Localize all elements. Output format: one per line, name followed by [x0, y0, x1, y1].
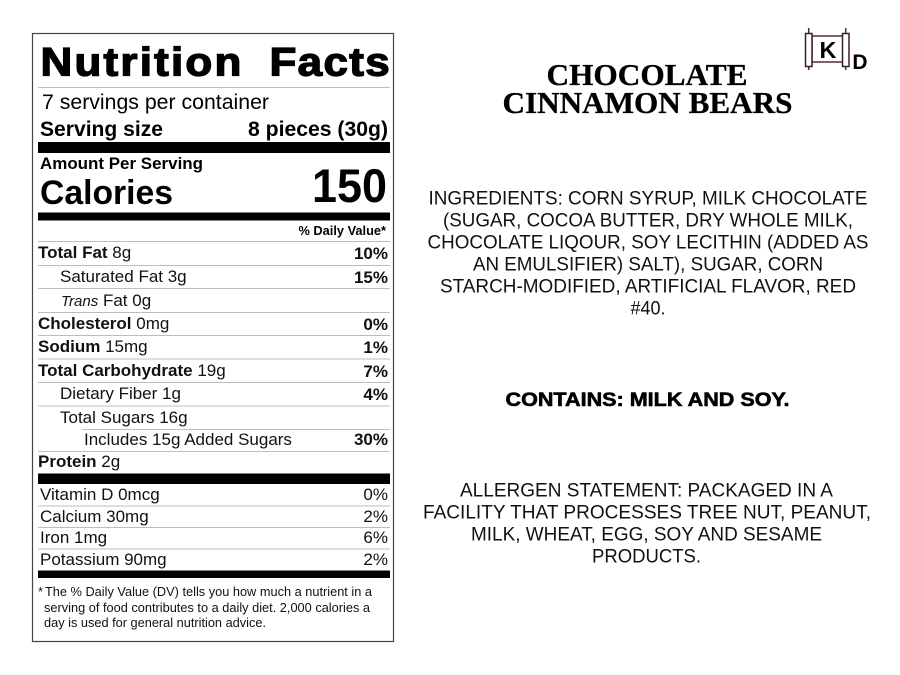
ingredients text: INGREDIENTS: CORN SYRUP, MILK CHOCOLATE	[428, 188, 868, 210]
row: protein: Protein 2g	[38, 452, 120, 471]
serving size row: Serving size	[40, 118, 163, 141]
row: saturated fat	[60, 267, 388, 287]
row: potassium: 2%	[363, 550, 388, 569]
icon: kosher dairy scroll mark: K	[820, 37, 837, 63]
row: calcium	[40, 507, 388, 526]
row: sodium: 1%	[363, 338, 388, 357]
row: cholesterol: Cholesterol 0mg	[38, 314, 169, 333]
row: added sugars: 30%	[354, 430, 388, 449]
row: potassium	[40, 550, 388, 569]
icon: kosher dairy scroll mark: D	[852, 51, 868, 74]
row: total carbohydrate: Total Carbohydrate 19g	[38, 361, 226, 380]
row: total carbohydrate	[38, 361, 388, 381]
heading: Nutrition Facts: Nutrition	[40, 39, 244, 84]
footnote: The % Daily Value (DV) tells you how much a nutrient in a	[45, 584, 373, 599]
allergen facility statement: PRODUCTS.	[592, 546, 701, 568]
daily value header: % Daily Value*	[298, 223, 386, 238]
row: total sugars: Total Sugars 16g	[60, 408, 188, 427]
ingredients text: STARCH-MODIFIED, ARTIFICIAL FLAVOR, RED	[440, 276, 856, 298]
row: calcium: 2%	[363, 507, 388, 526]
serving size row: 8 pieces (30g)	[248, 118, 388, 141]
heading: Nutrition Facts	[40, 39, 391, 84]
ingredients text	[428, 188, 868, 320]
thick divider	[38, 474, 390, 484]
row: saturated fat: Saturated Fat 3g	[60, 267, 187, 286]
row: added sugars	[84, 430, 388, 449]
allergen facility statement: ALLERGEN STATEMENT: PACKAGED IN A	[460, 480, 833, 502]
row: cholesterol: 0%	[363, 315, 388, 334]
row: dietary fiber	[60, 384, 388, 404]
row: dietary fiber: 4%	[363, 385, 388, 404]
footnote: day is used for general nutrition advice.	[44, 615, 266, 630]
footnote: serving of food contributes to a daily diet. 2,000 calories a	[44, 600, 371, 615]
row: potassium: Potassium 90mg	[40, 550, 167, 569]
ingredients text: (SUGAR, COCOA BUTTER, DRY WHOLE MILK,	[443, 210, 853, 232]
thick divider	[38, 142, 390, 153]
allergen facility statement: MILK, WHEAT, EGG, SOY AND SESAME	[471, 524, 822, 546]
row: trans fat: Trans Fat 0g	[61, 291, 151, 310]
product title	[502, 58, 792, 120]
ingredients text: AN EMULSIFIER) SALT), SUGAR, CORN	[473, 254, 823, 276]
row: vitamin D	[40, 485, 388, 504]
serving size row	[40, 118, 388, 141]
servings per container: 7 servings per container	[42, 91, 269, 114]
footnote	[38, 584, 373, 630]
row: saturated fat: 15%	[354, 268, 388, 287]
product title: CHOCOLATE	[546, 58, 748, 92]
row: vitamin D: 0%	[363, 485, 388, 504]
panel: nutrition facts label	[32, 34, 394, 642]
row: total fat	[38, 243, 388, 263]
allergen contains statement: CONTAINS: MILK AND SOY.	[506, 389, 790, 411]
row: calcium: Calcium 30mg	[40, 507, 149, 526]
row: sodium	[38, 337, 388, 357]
thick divider	[38, 212, 390, 220]
footnote: *	[38, 584, 43, 599]
row: iron	[40, 528, 388, 547]
ingredients text: CHOCOLATE LIQOUR, SOY LECITHIN (ADDED AS	[428, 232, 868, 254]
amount per serving: Amount Per Serving	[40, 154, 203, 173]
row: iron: 6%	[363, 528, 388, 547]
row: vitamin D: Vitamin D 0mcg	[40, 485, 160, 504]
thick divider	[38, 570, 390, 578]
row: cholesterol	[38, 314, 388, 334]
calories label: Calories	[40, 174, 173, 212]
row: dietary fiber: Dietary Fiber 1g	[60, 384, 181, 403]
row: total fat: Total Fat 8g	[38, 243, 131, 262]
icon: kosher dairy scroll mark	[806, 28, 868, 74]
row: total carbohydrate: 7%	[363, 362, 388, 381]
row: iron: Iron 1mg	[40, 528, 107, 547]
product title: CINNAMON BEARS	[502, 86, 792, 120]
allergen facility statement: FACILITY THAT PROCESSES TREE NUT, PEANUT,	[423, 502, 871, 524]
heading: Nutrition Facts: Facts	[270, 39, 391, 84]
row: sodium: Sodium 15mg	[38, 337, 148, 356]
row: added sugars: Includes 15g Added Sugars	[84, 430, 292, 449]
row: total fat: 10%	[354, 244, 388, 263]
ingredients text: #40.	[630, 298, 666, 320]
calories value: 150	[312, 159, 387, 212]
allergen facility statement	[423, 480, 871, 568]
